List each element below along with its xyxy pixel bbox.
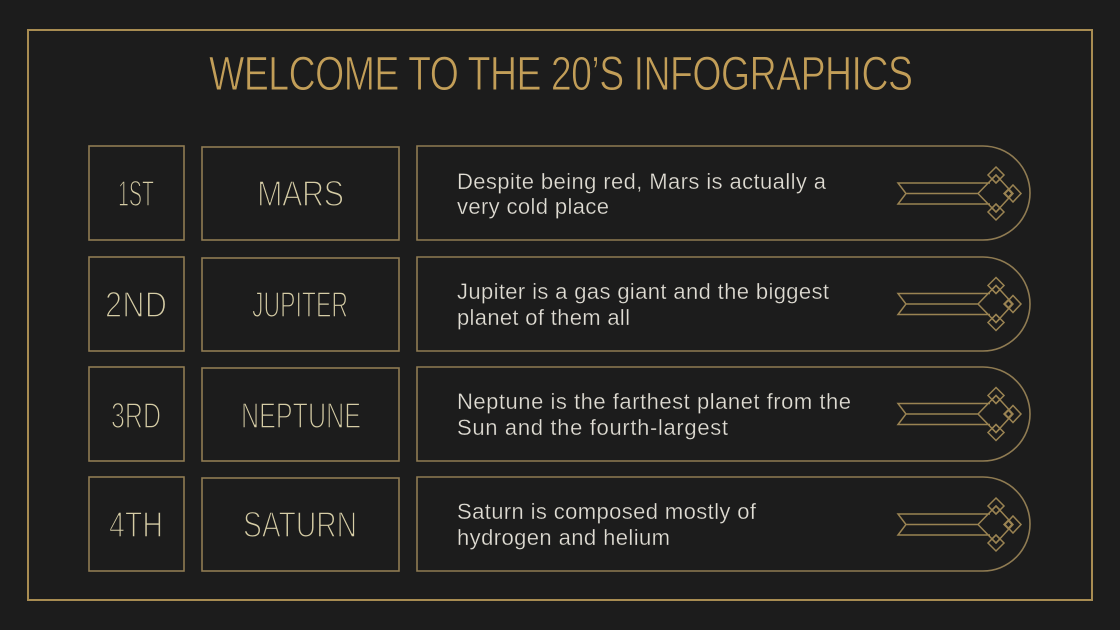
name box: Jupiter: JUPITER <box>252 284 348 325</box>
title: WELCOME TO THE 20’S INFOGRAPHICS <box>209 48 913 101</box>
row: Mars <box>89 146 1030 240</box>
name box: Neptune: NEPTUNE <box>241 395 361 436</box>
name box: Neptune <box>202 368 399 461</box>
icon: art deco arrow <box>898 388 1021 440</box>
description pill: Jupiter: Jupiter is a gas giant and the biggest <box>457 279 829 304</box>
rank box: 4th: 4TH <box>109 504 163 545</box>
description pill: Saturn <box>417 477 1030 571</box>
rank box: 2nd: 2ND <box>105 286 167 326</box>
icon: art deco arrow <box>898 498 1021 551</box>
description pill: Neptune: Neptune is the farthest planet from the <box>457 389 851 414</box>
description pill: Jupiter <box>417 257 1030 351</box>
name box: Saturn: SATURN <box>243 504 357 545</box>
name box: Jupiter <box>202 258 399 351</box>
description pill: Saturn: hydrogen and helium <box>457 525 670 550</box>
description pill: Neptune: Sun and the fourth-largest <box>457 415 728 440</box>
rank box: 2nd <box>89 257 184 351</box>
rank box: 1st: 1ST <box>118 173 154 214</box>
rank box: 4th <box>89 477 184 571</box>
rank box: 1st <box>89 146 184 240</box>
icon: art deco arrow <box>898 167 1021 220</box>
icon: art deco arrow <box>898 278 1021 330</box>
description pill: Jupiter: planet of them all <box>457 305 630 330</box>
description pill: Neptune <box>417 367 1030 461</box>
description pill: Mars <box>417 146 1030 240</box>
name box: Mars: MARS <box>257 175 344 215</box>
row: Saturn <box>89 477 1030 571</box>
rank box: 3rd <box>89 367 184 461</box>
description pill: Saturn: Saturn is composed mostly of <box>457 499 757 524</box>
description pill: Mars: very cold place <box>457 194 609 219</box>
row: Jupiter <box>89 257 1030 351</box>
row: Neptune <box>89 367 1030 461</box>
name box: Mars <box>202 147 399 240</box>
description pill: Mars: Despite being red, Mars is actually a <box>457 169 827 194</box>
rank box: 3rd: 3RD <box>111 395 161 436</box>
name box: Saturn <box>202 478 399 571</box>
